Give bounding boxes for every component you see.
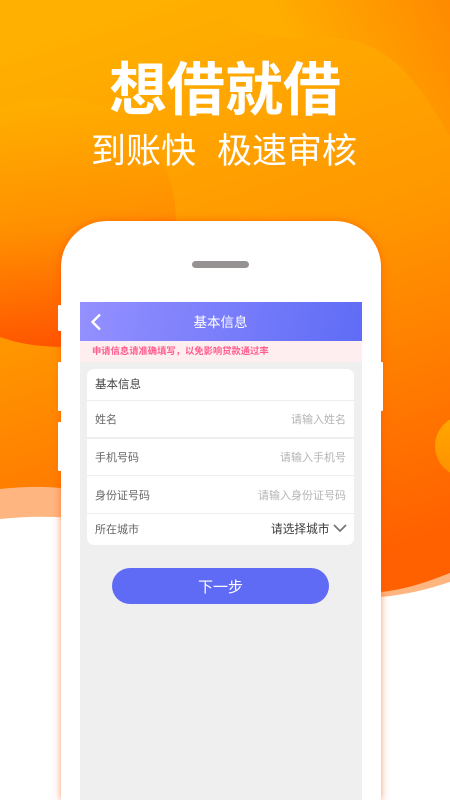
row: name: 姓名 bbox=[95, 414, 117, 426]
top right shade bbox=[225, 0, 450, 136]
title: 想借就借 bbox=[109, 58, 341, 123]
header title: 基本信息 bbox=[194, 315, 248, 330]
row: city bbox=[95, 522, 347, 536]
next button bbox=[112, 568, 329, 604]
row: id: 请输入身份证号码 bbox=[258, 490, 346, 502]
form card bbox=[87, 369, 354, 545]
side button left 1 bbox=[58, 305, 62, 331]
row: city: 请选择城市 bbox=[271, 523, 329, 536]
app screen bbox=[80, 302, 362, 800]
row: name: 请输入姓名 bbox=[291, 414, 346, 426]
phone body bbox=[61, 221, 381, 800]
row: phone bbox=[95, 452, 346, 464]
subtitle: 到账快 极速审核 bbox=[91, 132, 357, 171]
back arrow bbox=[91, 314, 101, 330]
main orange wave bbox=[0, 0, 450, 593]
row: id bbox=[95, 490, 346, 502]
left blob bbox=[0, 98, 176, 347]
side button left 2 bbox=[58, 362, 62, 411]
row: city: 所在城市 bbox=[95, 524, 139, 536]
chevron bbox=[333, 524, 347, 532]
right circle bbox=[435, 415, 450, 477]
header bar bbox=[80, 302, 362, 341]
speaker bbox=[192, 261, 249, 268]
row: phone: 请输入手机号 bbox=[280, 452, 346, 464]
phone mockup bbox=[58, 221, 383, 598]
side button left 3 bbox=[58, 422, 62, 471]
row: phone: 手机号码 bbox=[95, 452, 139, 464]
phone edge glow bbox=[61, 221, 381, 800]
light band under wave bbox=[0, 440, 450, 598]
notice bar bbox=[80, 341, 362, 362]
side button right bbox=[380, 362, 383, 411]
row: id: 身份证号码 bbox=[95, 490, 150, 502]
next button: 下一步 bbox=[198, 579, 243, 596]
row: section title: 基本信息 bbox=[95, 379, 141, 391]
notice text: 申请信息请准确填写，以免影响贷款通过率 bbox=[92, 346, 269, 356]
row: name bbox=[95, 414, 346, 426]
